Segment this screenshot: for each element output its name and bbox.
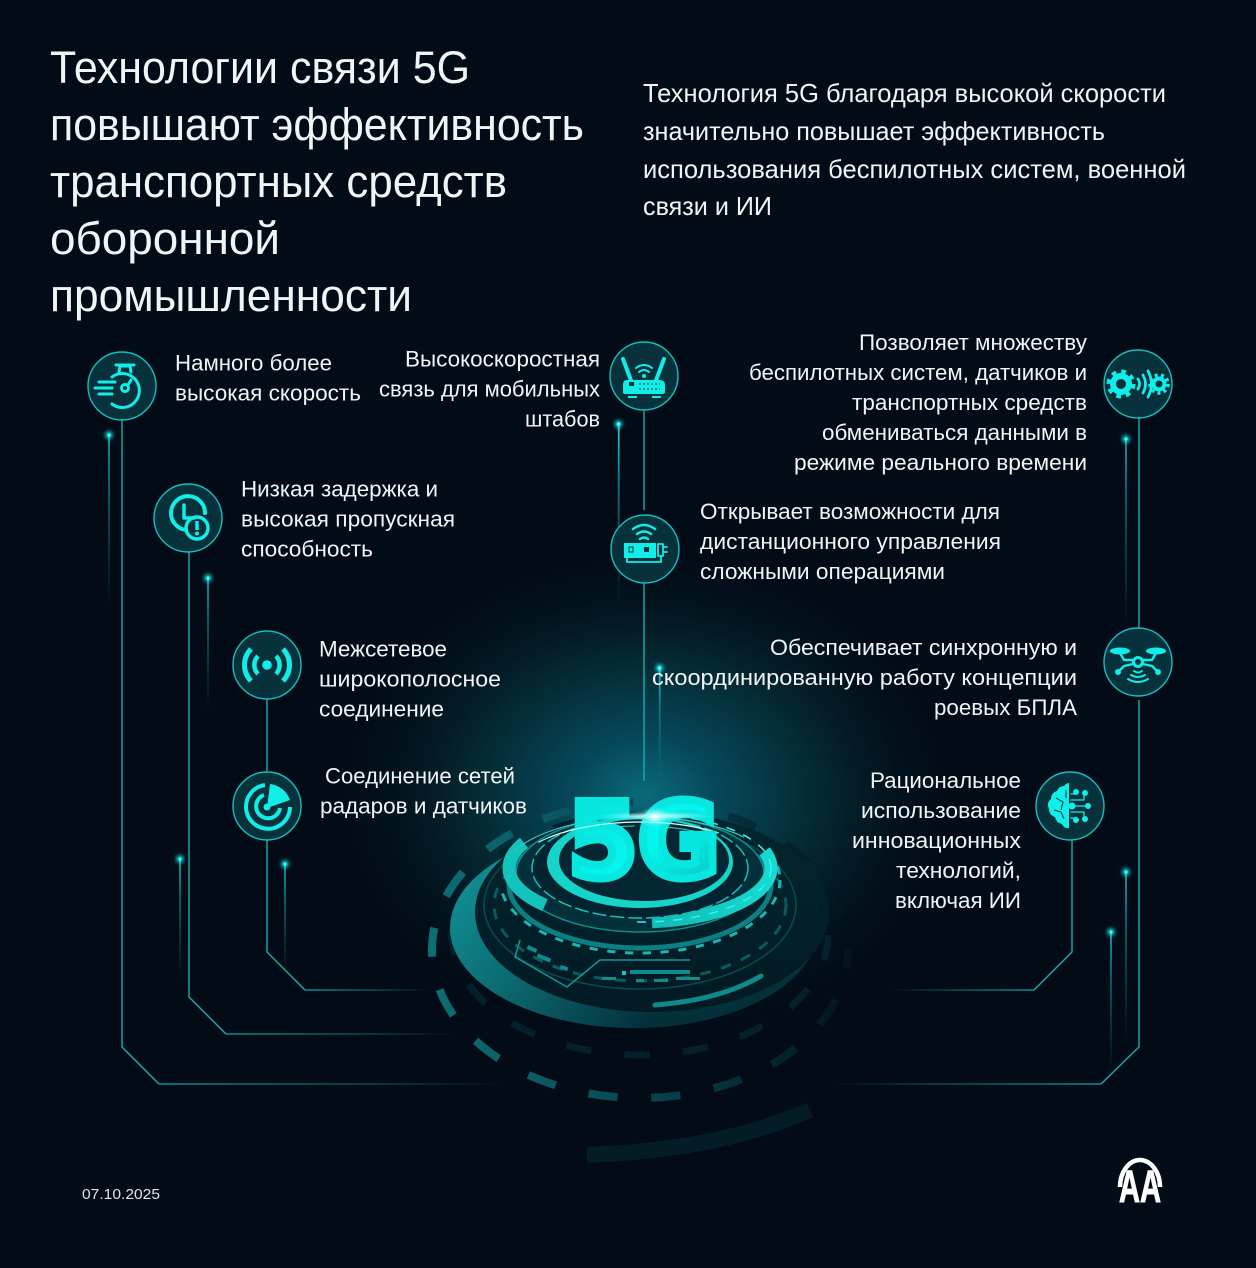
5G label: 5G: [568, 780, 720, 902]
item: real-time data: Позволяет множеству: [859, 330, 1088, 355]
central 5G hologram: [432, 780, 848, 1155]
item: drone swarm: Обеспечивает синхронную и: [770, 635, 1077, 660]
icon: clock with alert: [171, 496, 208, 539]
item: mobile headquarters: [379, 342, 678, 432]
thick ring segments: [509, 814, 771, 922]
intro text: [643, 78, 1186, 221]
item: real-time data: [749, 330, 1172, 475]
date: 07.10.2025: [82, 1187, 160, 1203]
logo: AA: [1119, 1160, 1161, 1212]
lower bright bar: [655, 976, 761, 1005]
item: AI: включая ИИ: [895, 888, 1021, 913]
icon: broadcast signal: [245, 649, 289, 681]
icon: stopwatch: [95, 365, 139, 408]
item: radar: [233, 764, 527, 840]
item: remote control: [611, 499, 1001, 584]
item: latency: способность: [241, 536, 373, 562]
glowing vertical accents: [106, 420, 1130, 1073]
big crescent: [450, 828, 818, 1028]
item: real-time data: беспилотных систем, датчиков и: [749, 360, 1087, 385]
title: Технологии связи 5G: [50, 42, 470, 93]
icon: AI brain: [1048, 783, 1091, 828]
intro text: использования беспилотных систем, военной: [643, 154, 1186, 184]
item: drone swarm: роевых БПЛА: [934, 695, 1077, 720]
ring plate: [516, 816, 764, 932]
inner dark disk: [475, 812, 829, 1012]
item: AI: Рациональное: [870, 768, 1021, 793]
item: speed: [88, 350, 361, 420]
item: broadband: широкополосное: [319, 666, 501, 692]
item: AI: технологий,: [896, 858, 1021, 883]
item: drone swarm: [652, 628, 1172, 720]
bright dashes on ring: [509, 814, 771, 922]
intro text: значительно повышает эффективность: [643, 116, 1105, 146]
top thin arcs: [498, 817, 782, 943]
item: latency: Низкая задержка и: [241, 476, 438, 502]
item: speed: высокая скорость: [175, 380, 361, 406]
item: latency: высокая пропускная: [241, 506, 455, 532]
faint lower arc: [587, 1110, 810, 1155]
title: [50, 42, 584, 321]
icon: router: [623, 359, 665, 398]
item: remote control: дистанционного управления: [700, 529, 1001, 554]
item: speed: Намного более: [175, 350, 332, 376]
bright flare: [595, 811, 715, 821]
item: broadband: соединение: [319, 696, 444, 722]
intro text: связи и ИИ: [643, 191, 772, 221]
item: AI: [852, 768, 1104, 913]
dashed bright ring: [500, 807, 780, 953]
item: broadband: [233, 631, 501, 722]
item: radar: Соединение сетей: [325, 764, 515, 788]
icon: radar: [246, 784, 290, 829]
icon: drone: [1110, 648, 1166, 682]
small dash rows: [527, 945, 700, 982]
title: транспортных средств: [50, 156, 507, 207]
title: оборонной: [50, 213, 280, 264]
item: AI: использование: [861, 798, 1021, 823]
icon: gears and signal: [1109, 371, 1168, 397]
outer dashed ring: [432, 802, 848, 1098]
item: real-time data: обмениваться данными в: [822, 420, 1087, 445]
item: mobile headquarters: штабов: [525, 406, 600, 432]
circuit outline: [515, 940, 690, 987]
inner ring: [547, 816, 733, 908]
item: mobile headquarters: связь для мобильных: [379, 376, 601, 402]
item: real-time data: режиме реального времени: [794, 450, 1087, 475]
item: broadband: Межсетевое: [319, 636, 447, 662]
item: remote control: сложными операциями: [700, 559, 945, 584]
ring overlay on 5G: [508, 822, 772, 934]
logo: AA: AA: [1119, 1161, 1161, 1212]
circuit ring: [532, 818, 748, 918]
connector lines: [122, 410, 1139, 1085]
item: remote control: Открывает возможности для: [700, 499, 1000, 524]
central glow: [315, 535, 975, 1055]
item: drone swarm: скоординированную работу концепции: [652, 665, 1077, 690]
item: real-time data: транспортных средств: [852, 390, 1087, 415]
icon: wifi adapter: [624, 525, 667, 562]
item: mobile headquarters: Высокоскоростная: [405, 346, 600, 372]
item: radar: радаров и датчиков: [320, 794, 527, 818]
item: latency: [154, 476, 455, 562]
title: промышленности: [50, 270, 412, 321]
second faint dashed ring: [452, 815, 828, 1055]
dim circuit rings: [484, 821, 796, 989]
teal band: [509, 822, 771, 948]
item: AI: инновационных: [852, 828, 1022, 853]
title: повышают эффективность: [50, 99, 584, 150]
intro text: Технология 5G благодаря высокой скорости: [643, 78, 1166, 108]
